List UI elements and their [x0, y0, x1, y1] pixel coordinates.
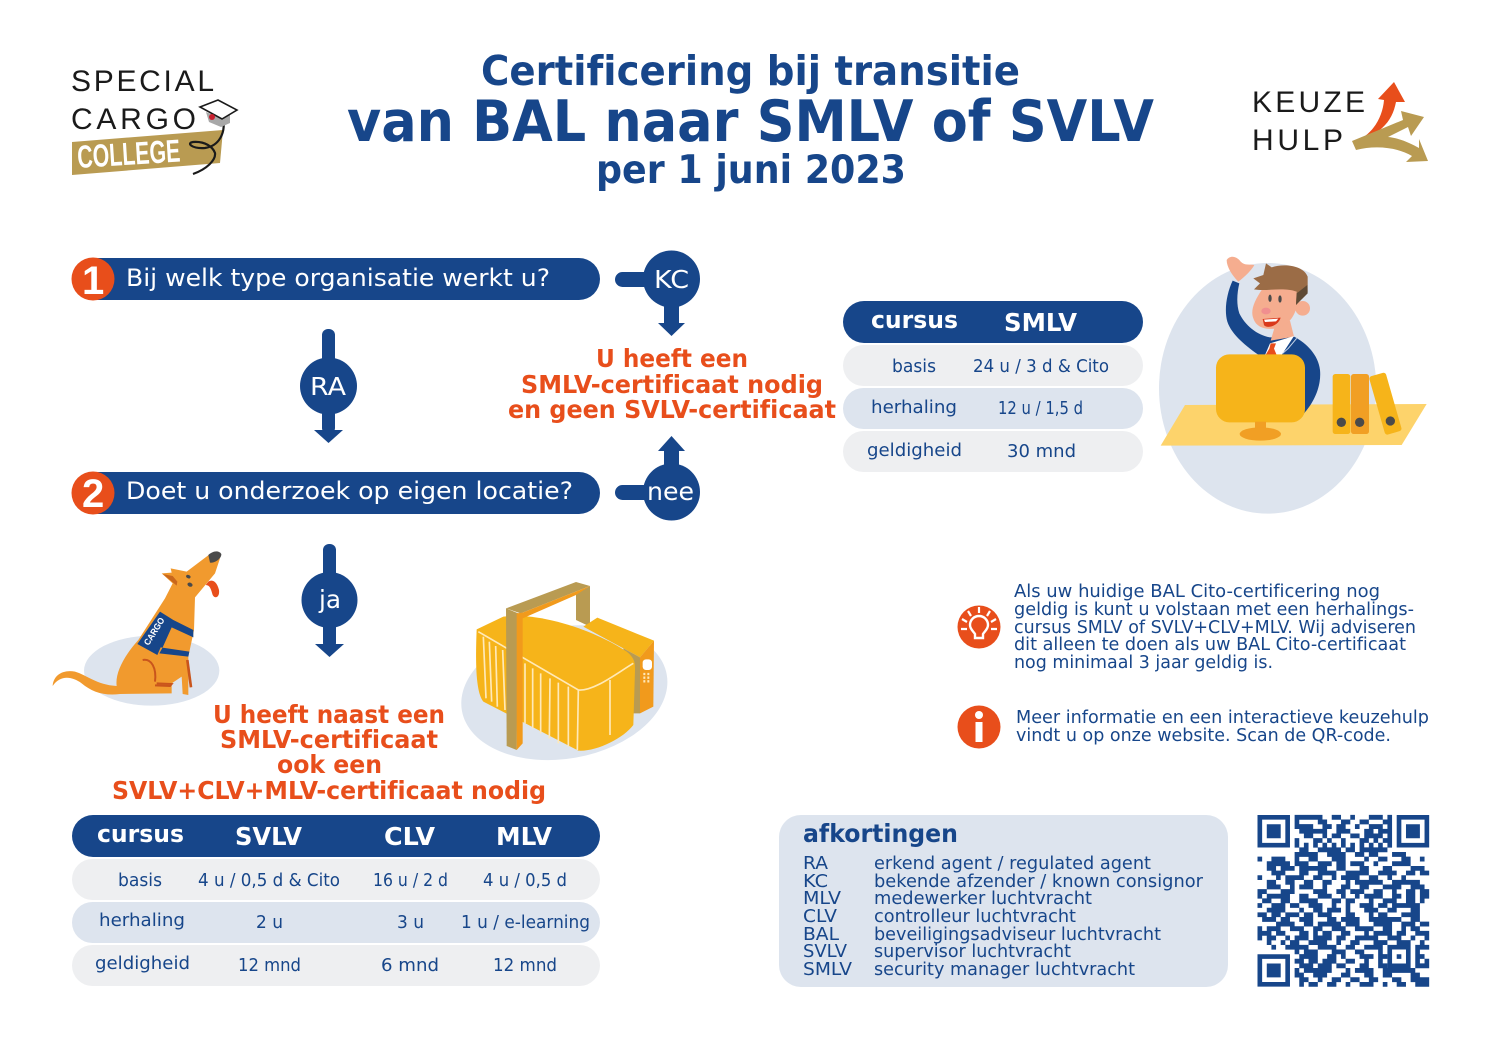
illustration: cargo container and scanner	[450, 582, 678, 776]
panel: afkortingen: BAL	[803, 924, 839, 945]
tip text: dit alleen te doen als uw BAL Cito-certificaat	[1014, 634, 1406, 655]
table: SVLV CLV MLV: MLV	[496, 822, 553, 851]
table: SVLV CLV MLV: 2 u	[256, 912, 283, 933]
icon: light bulb	[958, 606, 1000, 648]
table: SVLV CLV MLV: cursus	[97, 820, 184, 848]
panel: afkortingen: KC	[803, 871, 828, 892]
QR code	[1258, 815, 1429, 987]
table: SVLV CLV MLV: 4 u / 0,5 d & Cito	[198, 870, 340, 891]
title: van BAL naar SMLV of SVLV	[347, 89, 1154, 155]
table: SMLV: 24 u / 3 d & Cito	[973, 356, 1109, 377]
tip text: geldig is kunt u volstaan met een herhalings-	[1014, 599, 1414, 620]
outcome: SMLV only: en geen SVLV-certificaat	[508, 395, 836, 424]
logo: Special Cargo College: CARGO	[71, 103, 196, 136]
table: SVLV CLV MLV: 12 mnd	[238, 955, 301, 976]
table: SVLV CLV MLV: 3 u	[397, 912, 424, 933]
panel: afkortingen: security manager luchtvracht	[874, 959, 1135, 980]
panel: afkortingen: SVLV	[803, 941, 848, 962]
branch: ja	[302, 544, 358, 657]
logo: Keuzehulp: KEUZE	[1252, 86, 1365, 119]
table: SMLV: herhaling	[871, 397, 957, 418]
table: SMLV: geldigheid	[867, 440, 962, 461]
panel: afkortingen: RA	[803, 853, 829, 874]
panel: afkortingen: supervisor luchtvracht	[874, 941, 1071, 962]
illustration: man at desk	[1159, 257, 1427, 514]
outcome: SMLV plus SVLV, CLV, MLV	[112, 700, 546, 805]
outcome: SMLV only: SMLV-certificaat nodig	[521, 370, 823, 399]
table: SVLV CLV MLV: SVLV	[235, 822, 303, 851]
question 2 bar	[72, 472, 600, 516]
panel: afkortingen: SMLV	[803, 959, 853, 980]
logo: Keuzehulp: HULP	[1252, 124, 1343, 157]
logo: Keuzehulp	[1252, 82, 1428, 162]
question 2 bar: 2	[82, 472, 104, 516]
panel: afkortingen: medewerker luchtvracht	[874, 888, 1092, 909]
table: SMLV: basis	[892, 356, 936, 377]
tip text	[1014, 581, 1416, 673]
title	[347, 47, 1154, 193]
branch: KC	[615, 250, 700, 336]
question 1 bar: Bij welk type organisatie werkt u?	[126, 264, 550, 292]
branch: RA: RA	[310, 372, 346, 401]
panel: afkortingen: controlleur luchtvracht	[874, 906, 1076, 927]
panel: afkortingen: CLV	[803, 906, 838, 927]
table: SMLV: 30 mnd	[1007, 441, 1076, 462]
table: SMLV: 12 u / 1,5 d	[998, 398, 1083, 419]
question 1 bar	[72, 258, 600, 303]
panel: afkortingen: bekende afzender / known consignor	[874, 871, 1204, 892]
question 2 bar: Doet u onderzoek op eigen locatie?	[126, 477, 573, 505]
branch: nee: nee	[647, 477, 694, 506]
logo: Special Cargo College: SPECIAL	[71, 65, 214, 98]
panel: afkortingen	[779, 815, 1228, 987]
branch: nee	[615, 436, 700, 520]
table: SVLV CLV MLV	[72, 815, 600, 986]
information text: vindt u op onze website. Scan de QR-code.	[1016, 725, 1391, 746]
icon: information	[958, 706, 1000, 748]
table: SMLV	[843, 301, 1143, 472]
table: SMLV: SMLV	[1004, 308, 1078, 337]
panel: afkortingen: afkortingen	[803, 819, 958, 848]
table: SVLV CLV MLV: 12 mnd	[493, 955, 557, 976]
outcome: SMLV plus SVLV, CLV, MLV: ook een	[277, 750, 382, 779]
table: SVLV CLV MLV: basis	[118, 870, 162, 891]
outcome: SMLV plus SVLV, CLV, MLV: U heeft naast een	[213, 700, 445, 729]
title: Certificering bij transitie	[481, 47, 1020, 95]
logo: Special Cargo College	[71, 65, 237, 175]
table: SVLV CLV MLV: CLV	[384, 822, 436, 851]
table: SVLV CLV MLV: 4 u / 0,5 d	[483, 870, 567, 891]
table: SVLV CLV MLV: herhaling	[99, 910, 185, 931]
information text: Meer informatie en een interactieve keuzehulp	[1016, 707, 1429, 728]
tip text: cursus SMLV of SVLV+CLV+MLV. Wij adviseren	[1014, 617, 1416, 638]
tip text: nog minimaal 3 jaar geldig is.	[1014, 652, 1273, 673]
question 1 bar: 1	[82, 259, 104, 303]
table: SVLV CLV MLV: 6 mnd	[381, 955, 439, 976]
table: SVLV CLV MLV: geldigheid	[95, 953, 190, 974]
panel: afkortingen: beveiligingsadviseur luchtvracht	[874, 924, 1161, 945]
tip text: Als uw huidige BAL Cito-certificering nog	[1014, 581, 1380, 602]
outcome: SMLV only	[508, 344, 836, 424]
outcome: SMLV plus SVLV, CLV, MLV: SMLV-certificaat	[220, 725, 438, 754]
information text	[1016, 707, 1429, 746]
branch: KC: KC	[654, 265, 689, 294]
logo: Special Cargo College: COLLEGE	[76, 133, 181, 175]
illustration: sniffer dog	[53, 551, 221, 706]
branch: ja: ja	[318, 585, 341, 614]
outcome: SMLV only: U heeft een	[596, 344, 748, 373]
table: SVLV CLV MLV: 1 u / e-learning	[461, 912, 590, 933]
panel: afkortingen: MLV	[803, 888, 842, 909]
table: SMLV: cursus	[871, 306, 958, 334]
illustration: sniffer dog: CARGO	[142, 616, 167, 647]
table: SVLV CLV MLV: 16 u / 2 d	[373, 870, 448, 891]
panel: afkortingen: erkend agent / regulated agent	[874, 853, 1151, 874]
branch: RA	[300, 329, 357, 443]
outcome: SMLV plus SVLV, CLV, MLV: SVLV+CLV+MLV-certificaat nodig	[112, 776, 546, 805]
title: per 1 juni 2023	[596, 148, 906, 193]
